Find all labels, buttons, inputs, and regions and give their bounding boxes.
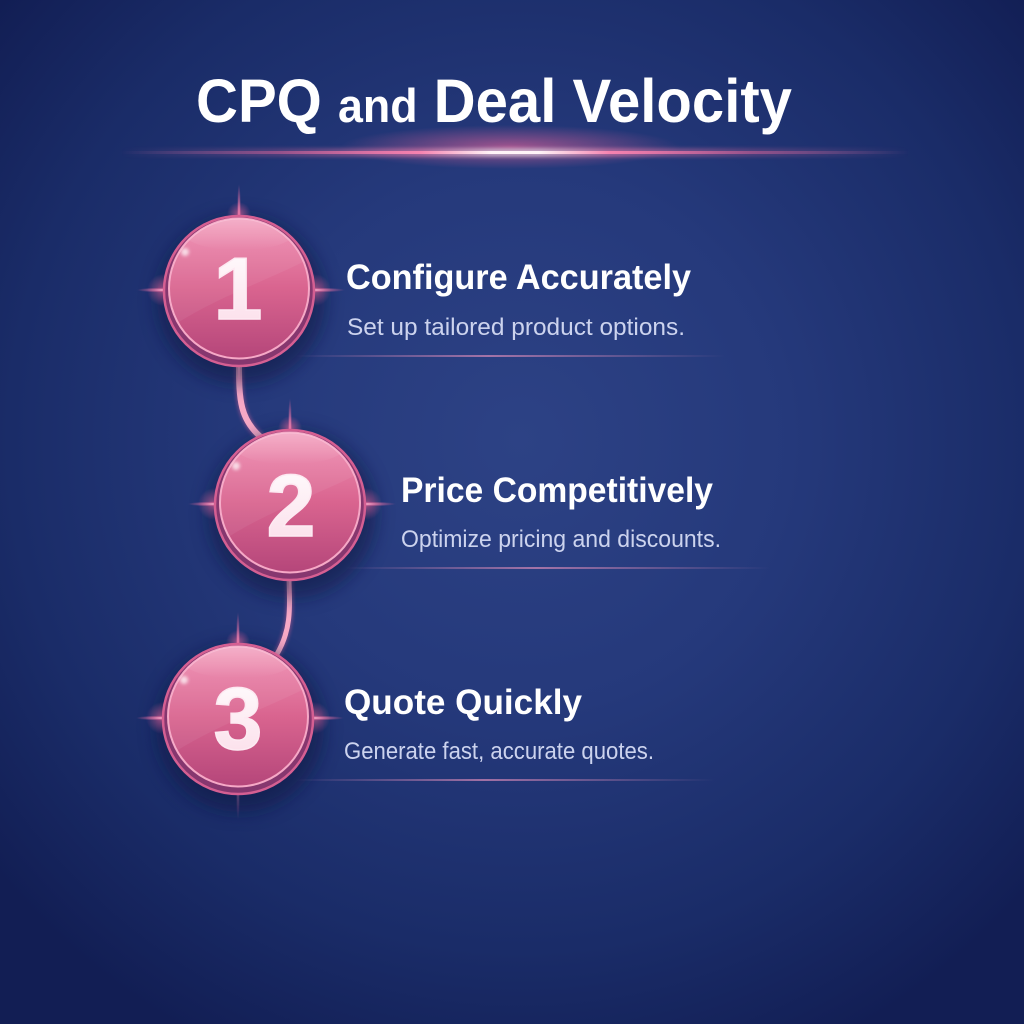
- step 1 description: Set up tailored product options.: [347, 314, 685, 341]
- numeral 3: 3: [214, 669, 262, 768]
- step 1 heading: Configure Accurately: [346, 258, 692, 297]
- step 2 description: Optimize pricing and discounts.: [401, 526, 721, 553]
- step 1 badge: [137, 184, 345, 392]
- step 3 rule: [295, 779, 715, 781]
- connector 2 to 3: [277, 578, 290, 654]
- title glow rule: [120, 125, 910, 169]
- step 3 badge: [136, 612, 344, 820]
- step 2 text: [401, 471, 721, 553]
- step 2 heading: Price Competitively: [401, 471, 714, 510]
- step 3 text: [344, 683, 654, 765]
- step 3 description: Generate fast, accurate quotes.: [344, 738, 654, 765]
- step 3 heading: Quote Quickly: [344, 683, 583, 722]
- connector 1 to 2: [239, 364, 262, 438]
- numeral 2: 2: [267, 456, 315, 555]
- numeral 1: 1: [214, 239, 262, 338]
- step 1 rule: [295, 355, 725, 357]
- step 2 rule: [345, 567, 770, 569]
- title: CPQ and Deal Velocity: [196, 67, 792, 135]
- step 1 text: [346, 258, 692, 341]
- step 2 badge: [188, 398, 396, 606]
